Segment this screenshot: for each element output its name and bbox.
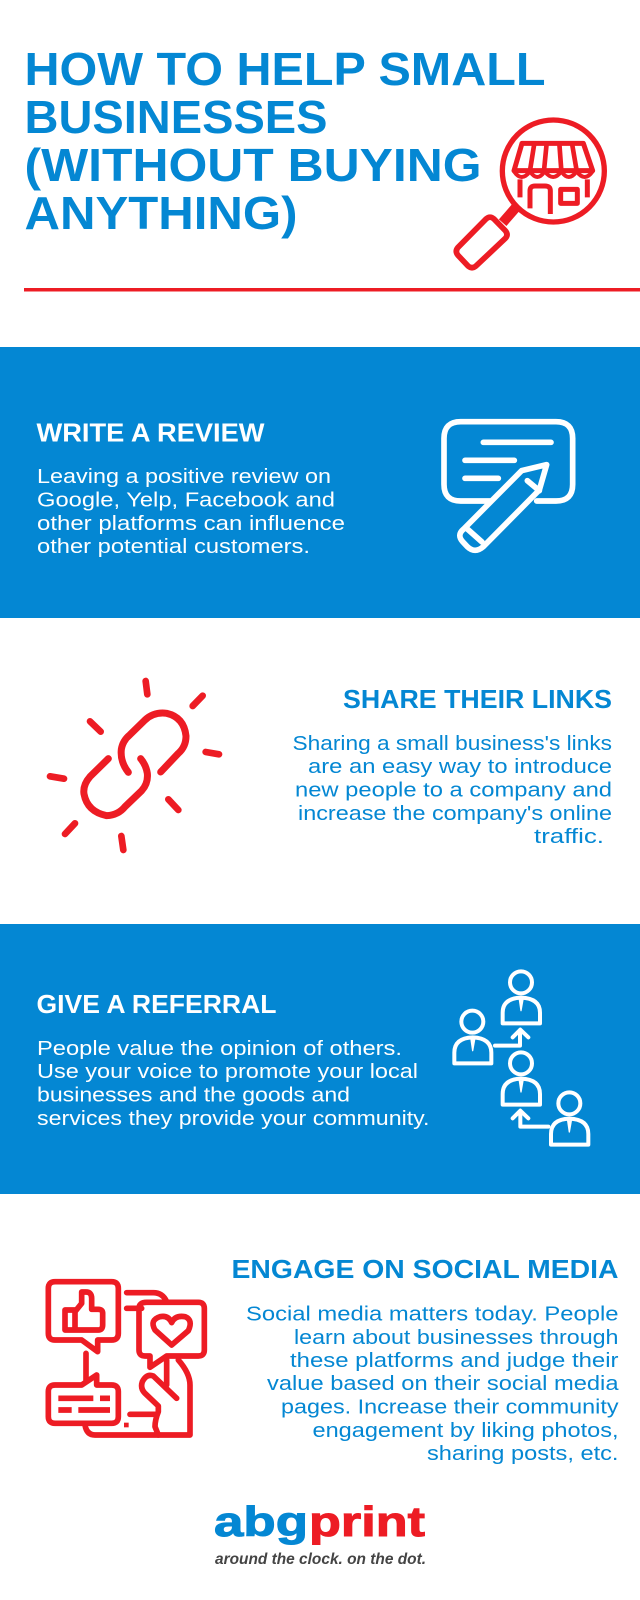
rule	[24, 288, 640, 292]
text: engage on social media: Social media matters today. People	[246, 1304, 618, 1326]
title: BUSINESSES	[24, 91, 328, 143]
title	[24, 43, 546, 239]
text: give a referral: People value the opinion of others.	[37, 1038, 402, 1060]
text: engage on social media: engagement by liking photos,	[312, 1420, 618, 1442]
text: give a referral	[37, 1038, 429, 1130]
logo: abgprint: abg	[214, 1498, 308, 1545]
heading: give a referral: GIVE A REFERRAL	[36, 989, 277, 1019]
text: give a referral: businesses and the goods and	[37, 1084, 350, 1106]
icon: magnifying glass over storefront	[456, 120, 604, 268]
title: ANYTHING)	[24, 187, 298, 239]
text: share their links	[292, 733, 612, 848]
text: write a review: other potential customers.	[37, 536, 310, 558]
heading: engage on social media: ENGAGE ON SOCIAL MEDIA	[232, 1254, 619, 1284]
panel: give a referral	[0, 924, 640, 1194]
text: share their links: traffic.	[534, 826, 604, 848]
text: engage on social media: sharing posts, etc.	[427, 1443, 618, 1465]
icon: social media hand and bubbles	[48, 1282, 204, 1435]
text: engage on social media: these platforms and judge their	[290, 1350, 619, 1372]
person left	[454, 1011, 491, 1063]
logo: abgprint: around the clock. on the dot.	[215, 1551, 426, 1568]
text: engage on social media: learn about businesses through	[294, 1327, 618, 1349]
arrow left up	[513, 1111, 548, 1127]
text: write a review: other platforms can influence	[37, 513, 345, 535]
icon: chain link with rays	[50, 681, 219, 850]
panel: engage on social media	[48, 1254, 620, 1465]
text: share their links: increase the company's online	[298, 803, 612, 825]
icon: pencil writing on speech bubble	[444, 422, 573, 550]
text: write a review	[37, 466, 345, 558]
title: (WITHOUT BUYING	[24, 139, 481, 191]
heading: write a review: WRITE A REVIEW	[36, 418, 265, 448]
text: engage on social media: value based on their social media	[267, 1373, 620, 1395]
text: engage on social media: pages. Increase their community	[281, 1396, 618, 1418]
title: HOW TO HELP SMALL	[24, 43, 546, 95]
text: share their links: new people to a company and	[295, 780, 612, 802]
icon: people referral chain	[454, 971, 588, 1145]
text: write a review: Leaving a positive review on	[37, 466, 331, 488]
person bottom right	[551, 1092, 588, 1145]
text: share their links: are an easy way to introduce	[308, 756, 612, 778]
person middle	[503, 1052, 540, 1105]
text: share their links: Sharing a small business's links	[292, 733, 612, 755]
logo: abgprint: print	[309, 1498, 425, 1545]
logo: abgprint	[214, 1498, 426, 1568]
text: engage on social media	[246, 1304, 620, 1465]
panel: write a review	[0, 347, 640, 618]
text: give a referral: services they provide your community.	[37, 1108, 429, 1130]
heading: share their links: SHARE THEIR LINKS	[343, 684, 612, 714]
text: give a referral: Use your voice to promote your local	[37, 1061, 418, 1083]
panel: share their links	[50, 681, 612, 850]
arrow up	[495, 1030, 528, 1046]
person top	[503, 971, 540, 1023]
text: write a review: Google, Yelp, Facebook and	[37, 490, 335, 512]
